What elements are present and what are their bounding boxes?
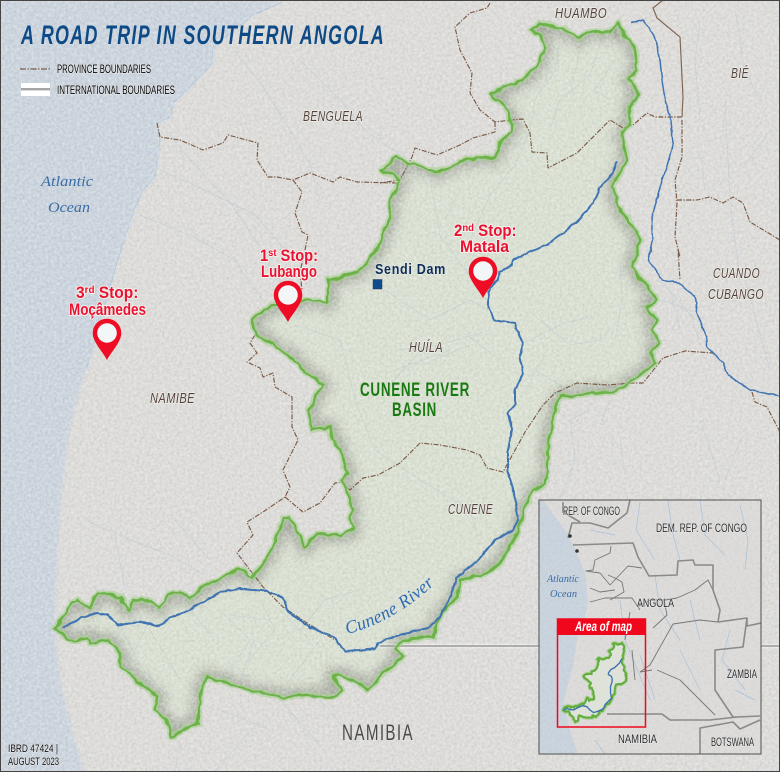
legend: province boundary sample [20,68,51,70]
basin label: BASIN [392,400,437,421]
ocean: Atlantic [0,0,282,772]
inset labels: REP. OF CONGO [563,504,620,518]
1st stop: Lubango: Stop: [276,247,318,265]
legend: province label: PROVINCE BOUNDARIES [57,62,151,76]
map reference [8,743,59,768]
pin: Lubango [274,281,302,322]
inset texture [539,500,761,754]
inset: mini basin [563,643,626,722]
2nd stop: Matala: 2 [454,222,462,240]
legend [20,62,175,97]
province labels: CUANDO [713,265,760,282]
inset labels: ZAMBIA [727,667,757,681]
inset labels: BOTSWANA [711,735,754,749]
legend: international boundary sample [21,83,50,96]
river label: Cunene River: Cunene River [346,578,432,633]
2nd stop: Matala [454,222,517,298]
area of map box: Area of map [574,619,632,634]
1st stop: Lubango: Lubango [261,263,317,281]
province labels: BENGUELA [303,108,363,125]
province labels [150,5,764,518]
province labels: CUNENE [448,501,493,518]
inset locator map [539,500,761,754]
inset country boundaries [563,500,761,754]
3rd stop: Moçâmedes: Moçâmedes [69,301,146,319]
Cunene River [63,162,617,651]
area of map box [558,619,646,727]
country label: Namibia: NAMIBIA [342,720,414,745]
inset border [539,500,761,754]
inset dots [568,534,579,553]
inset province boundaries [586,546,718,715]
3rd stop: Moçâmedes [69,285,146,360]
basin label [360,380,470,421]
coastline [86,2,282,370]
Sendi Dam label: Sendi Dam [375,261,446,278]
province labels: HUAMBO [555,5,607,22]
inset ocean [539,500,587,754]
title: A ROAD TRIP IN SOUTHERN ANGOLA [20,20,385,50]
ocean label: Atlantic [40,174,93,190]
2nd stop: Matala: Matala [460,238,510,256]
inset labels: Atlantic [546,574,580,585]
2nd stop: Matala: Stop: [474,222,517,240]
province labels: BIÉ [731,65,749,82]
international boundary: Namibia [380,644,780,648]
1st stop: Lubango: st [268,248,277,259]
province labels: HUÍLA [409,339,443,356]
pin: Moçâmedes [93,319,121,360]
inset labels: ANGOLA [637,596,674,610]
legend: international label: INTERNATIONAL BOUNDARIES [57,83,175,97]
inset rivers [590,500,755,754]
basin outline: green boundary [55,22,660,737]
province labels: NAMIBE [150,390,195,407]
map reference: IBRD 47424 | [8,743,58,755]
map reference: AUGUST 2023 [8,756,59,768]
province boundary: solid north-east section [653,0,683,117]
Sendi Dam square [373,280,382,289]
2nd stop: Matala: nd [462,223,474,234]
province boundaries [157,3,780,640]
inset labels: NAMIBIA [618,732,657,746]
inset labels: Ocean [550,589,577,600]
1st stop: Lubango: 1 [260,247,268,265]
inset labels [546,504,757,749]
3rd stop: Moçâmedes: rd [85,285,94,296]
eastern river [632,20,778,396]
3rd stop: Moçâmedes: Stop: [94,285,138,302]
1st stop: Lubango [260,247,318,322]
Sendi Dam marker [373,261,446,289]
ocean label: Ocean [48,200,90,216]
basin fill with inner shadow [55,22,660,737]
3rd stop: Moçâmedes: 3 [76,285,85,302]
basin label: CUNENE RIVER [360,380,470,401]
ocean label [40,174,93,216]
pin: Matala [469,257,497,298]
